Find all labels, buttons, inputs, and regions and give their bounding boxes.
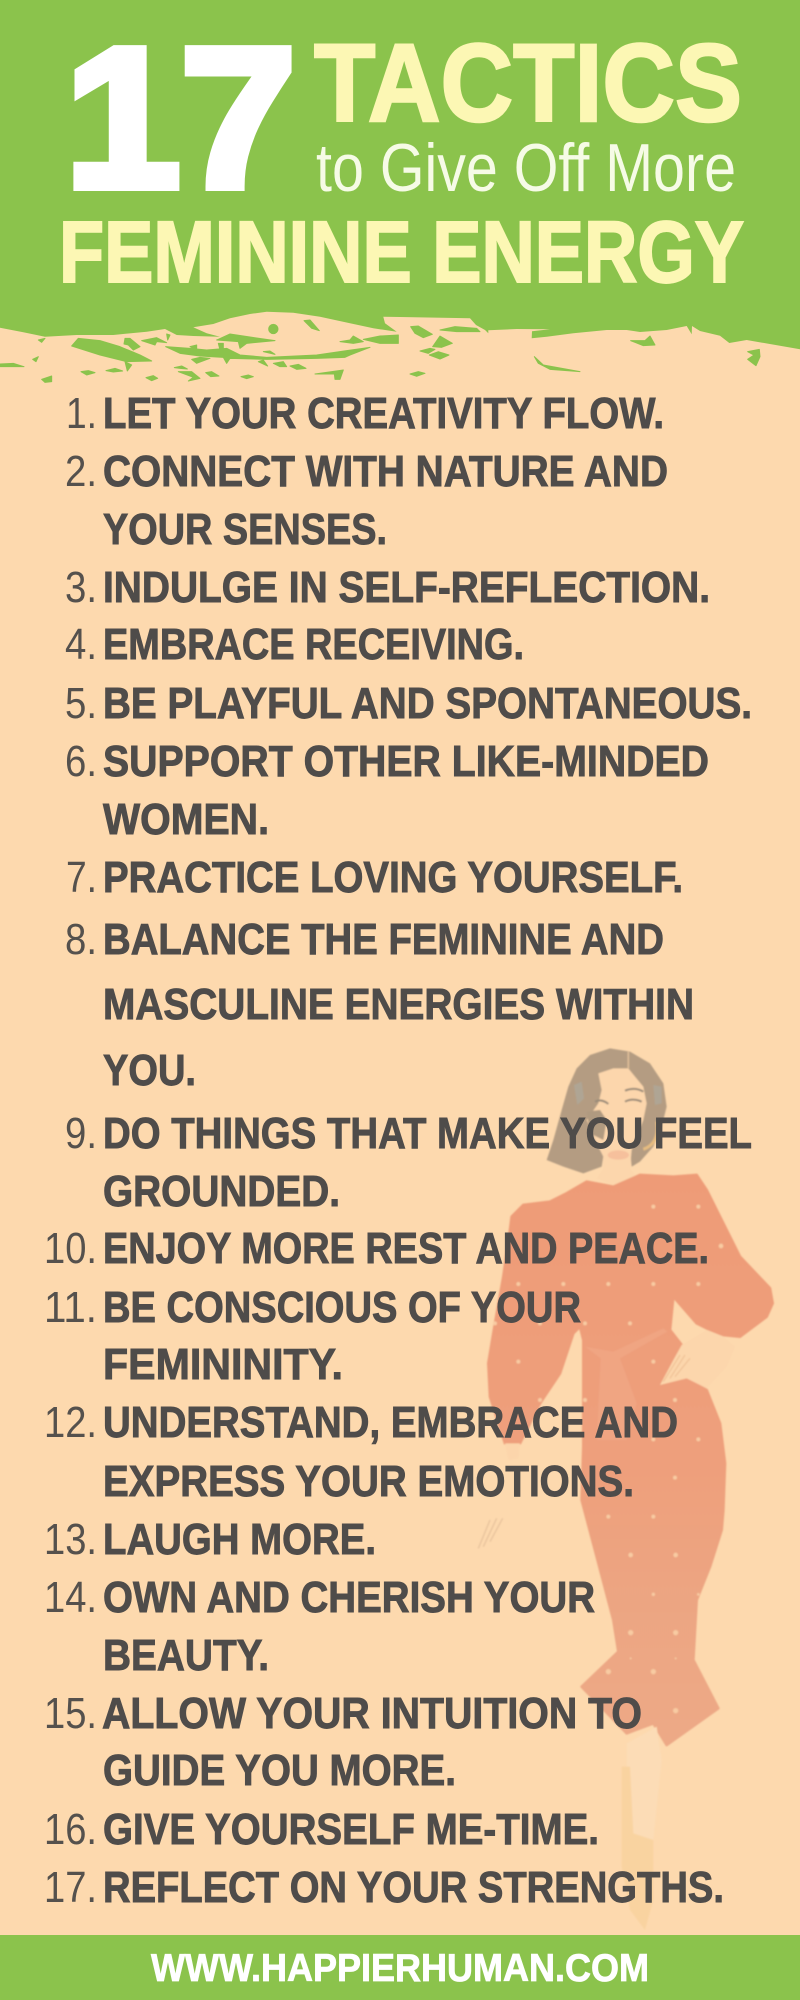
item 2: CONNECT WITH NATURE AND [103, 448, 668, 496]
item 6: SUPPORT OTHER LIKE-MINDED [103, 738, 709, 786]
title: big number 17: 17 [65, 8, 296, 230]
item 6: WOMEN. [103, 796, 269, 844]
item 1: LET YOUR CREATIVITY FLOW. [103, 390, 664, 438]
item 11: FEMININITY. [103, 1341, 343, 1389]
item 12: UNDERSTAND, EMBRACE AND [103, 1399, 678, 1447]
item 5: 5. [65, 680, 97, 728]
item 15: ALLOW YOUR INTUITION TO [102, 1690, 642, 1738]
item 10: 10. [44, 1225, 97, 1273]
item 7: PRACTICE LOVING YOURSELF. [103, 854, 683, 902]
dress [488, 1175, 773, 1745]
item 7: 7. [66, 854, 97, 902]
item 4: EMBRACE RECEIVING. [103, 621, 524, 669]
shoe [622, 1767, 653, 1930]
item 2 [65, 448, 668, 554]
hair [547, 1048, 667, 1173]
hand on hip [660, 1330, 735, 1388]
eyes and brows [595, 1089, 643, 1104]
numbered list of tactics [44, 390, 752, 1912]
item 2: YOUR SENSES. [103, 506, 387, 554]
green band [0, 0, 800, 349]
subtitle: to Give Off More: to Give Off More [316, 130, 736, 206]
belt and sash [585, 1328, 667, 1440]
fingers [663, 1355, 690, 1382]
item 9: GROUNDED. [103, 1168, 340, 1216]
item 6 [65, 738, 709, 844]
item 14: 14. [44, 1574, 97, 1622]
item 8: BALANCE THE FEMININE AND [103, 916, 664, 964]
item 12: EXPRESS YOUR EMOTIONS. [103, 1458, 634, 1506]
item 9: 9. [65, 1110, 97, 1158]
leg [627, 1727, 662, 1840]
item 10: ENJOY MORE REST AND PEACE. [103, 1225, 709, 1273]
item 11: BE CONSCIOUS OF YOUR [103, 1284, 581, 1332]
torn edge flecks [0, 320, 760, 382]
stray sketch lines [478, 1518, 503, 1548]
item 8: MASCULINE ENERGIES WITHIN [103, 981, 694, 1029]
item 17: 17. [44, 1864, 97, 1912]
earring [643, 1122, 657, 1149]
item 14 [44, 1574, 595, 1680]
item 6: 6. [65, 738, 97, 786]
item 17: REFLECT ON YOUR STRENGTHS. [103, 1864, 724, 1912]
face and neck [587, 1068, 647, 1185]
item 14: BEAUTY. [103, 1632, 269, 1680]
dress dots [493, 1205, 723, 1713]
item 12 [44, 1399, 678, 1506]
item 13: 13. [44, 1516, 97, 1564]
item 11: 11. [44, 1284, 97, 1332]
item 12: 12. [44, 1399, 97, 1447]
item 16: 16. [44, 1806, 97, 1854]
item 15: 15. [44, 1690, 97, 1738]
item 4: 4. [65, 621, 97, 669]
lower hand [505, 1443, 520, 1460]
item 15 [44, 1690, 642, 1795]
item 14: OWN AND CHERISH YOUR [103, 1574, 595, 1622]
lips [608, 1150, 629, 1160]
item 16: GIVE YOURSELF ME-TIME. [103, 1806, 599, 1854]
item 8: 8. [65, 916, 97, 964]
item 3: INDULGE IN SELF-REFLECTION. [103, 564, 710, 612]
item 11 [44, 1284, 581, 1389]
part line [626, 1052, 630, 1068]
header: green band with torn edge [0, 0, 800, 382]
item 2: 2. [65, 448, 97, 496]
item 8: YOU. [103, 1047, 196, 1095]
item 3: 3. [65, 564, 97, 612]
title: TACTICS: TACTICS [314, 22, 742, 145]
illustration: woman in orange dress [478, 1048, 773, 1930]
item 1: 1. [66, 390, 97, 438]
hair curl over cheek [587, 1110, 607, 1140]
item 15: GUIDE YOU MORE. [103, 1747, 456, 1795]
website url: WWW.HAPPIERHUMAN.COM [151, 1947, 649, 1990]
item 8 [65, 916, 694, 1095]
hair highlights [574, 1082, 662, 1105]
item 13: LAUGH MORE. [103, 1516, 376, 1564]
item 9 [65, 1110, 752, 1216]
footer band [0, 1935, 800, 2000]
